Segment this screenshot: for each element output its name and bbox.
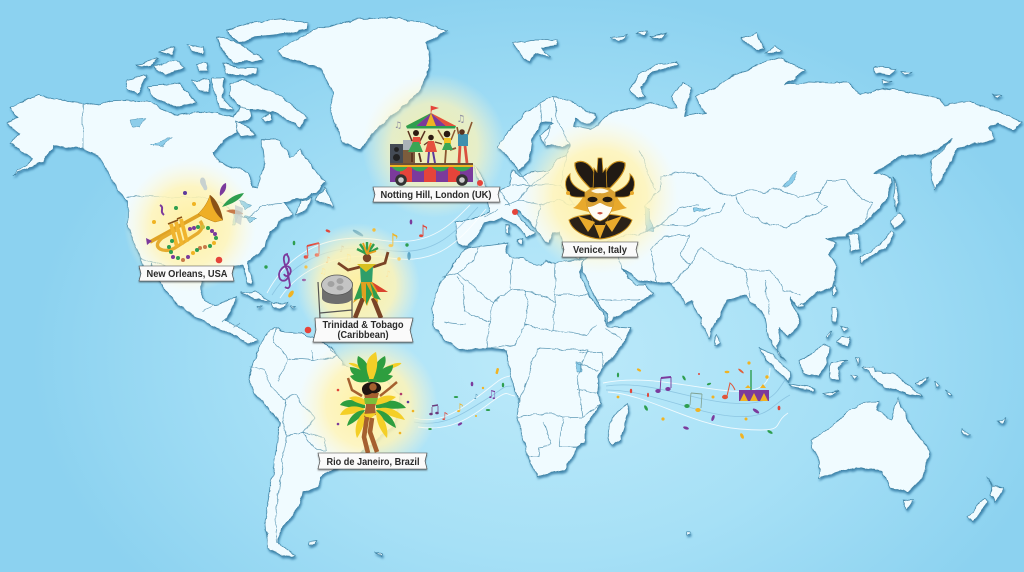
side feathers bbox=[340, 395, 406, 438]
Caribbean islands bbox=[240, 292, 296, 309]
glow: Rio bbox=[298, 335, 438, 475]
Severnaya Zemlya bbox=[742, 33, 782, 53]
Greenland bbox=[278, 18, 447, 150]
dancer three bbox=[438, 130, 456, 163]
small notes: ♪ bbox=[325, 256, 331, 266]
confetti and notes: Atlantic bbox=[264, 220, 428, 298]
New Siberian Islands bbox=[874, 67, 1002, 98]
icon: beamed note bbox=[304, 243, 319, 259]
float deck bbox=[390, 163, 473, 165]
confetti and notes: Brazil to Africa: ♪ bbox=[456, 401, 464, 415]
bikini bbox=[364, 398, 378, 404]
dancer two bbox=[424, 135, 442, 163]
small notes: ♪ bbox=[387, 230, 399, 252]
Eurasia bbox=[455, 58, 1022, 360]
legs bbox=[355, 298, 381, 318]
glow: Trinidad bbox=[296, 223, 420, 347]
icon: Trinidad dancer bbox=[338, 242, 388, 318]
Pacific islands bbox=[686, 382, 1007, 535]
New Guinea bbox=[863, 367, 928, 397]
speaker bbox=[390, 144, 403, 163]
label: Rio de Janeiro, Brazil: Rio de Janeiro, Brazil bbox=[326, 457, 420, 468]
New Zealand bbox=[967, 477, 1003, 521]
Africa bbox=[432, 243, 632, 477]
legs bbox=[364, 417, 377, 453]
Australia bbox=[812, 398, 929, 492]
music stave: Caribbean to London bbox=[267, 205, 486, 298]
confetti and notes: Brazil to Africa bbox=[428, 368, 504, 430]
music stave: Brazil to Africa bbox=[414, 376, 515, 428]
Sri Lanka bbox=[714, 335, 720, 346]
confetti around trumpet bbox=[152, 177, 244, 225]
glow: New Orleans bbox=[124, 160, 256, 292]
small notes: ♪ bbox=[418, 222, 428, 242]
Tasmania bbox=[903, 499, 914, 510]
small notes: ♪ bbox=[339, 245, 345, 255]
head and hair bbox=[362, 382, 381, 395]
bunting bbox=[390, 165, 473, 172]
UK and Ireland bbox=[473, 165, 487, 192]
Taiwan and Hainan bbox=[798, 285, 837, 307]
mask face bbox=[586, 188, 614, 221]
side wings bbox=[573, 194, 627, 212]
music stave: Indian Ocean bbox=[603, 368, 790, 430]
label: Venice, Italy bbox=[562, 242, 638, 257]
Svalbard bbox=[512, 40, 557, 63]
body bbox=[364, 393, 379, 417]
icon: Venetian mask bbox=[566, 158, 634, 239]
icon: carnival float: ♫ bbox=[457, 114, 465, 125]
label: Trinidad & Tobago (Caribbean): Trinidad & Tobago bbox=[322, 320, 404, 331]
notes near float: ♫ bbox=[394, 121, 402, 131]
Indonesia bbox=[759, 345, 860, 396]
red note bbox=[727, 383, 735, 396]
small notes: ♫ bbox=[344, 253, 352, 264]
Madagascar bbox=[607, 403, 629, 446]
glow: Notting Hill bbox=[362, 74, 506, 218]
jester hat bbox=[566, 158, 634, 197]
dancer one bbox=[408, 130, 425, 162]
Franz Josef Land bbox=[610, 30, 667, 41]
small notes: ♫ bbox=[319, 267, 327, 276]
notes bbox=[429, 405, 439, 415]
Novaya Zemlya bbox=[629, 62, 679, 97]
flag bbox=[431, 106, 438, 113]
dots bbox=[337, 389, 414, 434]
label: New Orleans, USA: New Orleans, USA bbox=[146, 269, 228, 280]
confetti and notes: Brazil to Africa: ♪ bbox=[441, 410, 449, 423]
label: Notting Hill, London (UK) bbox=[373, 187, 500, 202]
label: Rio de Janeiro, Brazil bbox=[318, 453, 427, 469]
Philippines bbox=[826, 308, 850, 347]
small notes: ♪ bbox=[385, 270, 391, 280]
green beamed note bbox=[684, 393, 702, 412]
collar bbox=[569, 214, 632, 239]
head and plume bbox=[363, 254, 371, 262]
trumpet bbox=[146, 195, 223, 250]
Sakhalin bbox=[894, 177, 899, 210]
skirt bbox=[353, 282, 388, 306]
label: Venice, Italy: Venice, Italy bbox=[573, 245, 627, 256]
icon: steel drum bbox=[318, 275, 352, 318]
tent roof bbox=[406, 113, 456, 126]
icon: carnival float bbox=[390, 106, 473, 186]
label: Trinidad & Tobago (Caribbean): (Caribbean) bbox=[338, 330, 388, 341]
arms bbox=[338, 252, 388, 270]
dancer four bbox=[457, 122, 472, 163]
glow: Venice bbox=[522, 118, 678, 274]
location markers bbox=[216, 180, 518, 333]
icon: trumpet with beads bbox=[146, 177, 244, 262]
party drum bbox=[739, 370, 769, 401]
confetti and notes: Brazil to Africa: ♪ bbox=[474, 393, 478, 401]
confetti and notes: Brazil to Africa: ♫ bbox=[487, 388, 497, 401]
North America bbox=[7, 95, 325, 343]
arms bbox=[348, 378, 397, 396]
label: Trinidad & Tobago (Caribbean) bbox=[313, 318, 413, 342]
small notes bbox=[319, 222, 428, 280]
icon: treble clef bbox=[279, 254, 291, 288]
southern Atlantic islands bbox=[308, 541, 382, 557]
confetti bbox=[617, 361, 780, 439]
float body bbox=[390, 165, 473, 182]
purple beamed note bbox=[655, 377, 671, 393]
torso bbox=[360, 266, 373, 284]
Japan bbox=[860, 213, 905, 263]
label: Notting Hill, London (UK): Notting Hill, London (UK) bbox=[380, 190, 492, 201]
icon: Rio samba dancer bbox=[337, 352, 414, 453]
label: New Orleans, USA bbox=[139, 266, 234, 281]
lakes, inland seas and country borders bbox=[83, 96, 872, 543]
headdress feathers bbox=[349, 352, 401, 382]
wheels bbox=[395, 174, 407, 186]
confetti, notes and drum: Indian Ocean bbox=[617, 361, 780, 439]
South America bbox=[248, 328, 400, 557]
Canadian Arctic islands bbox=[230, 80, 307, 127]
Sicily, Sardinia, Corsica, Cyprus bbox=[506, 225, 582, 259]
beads bbox=[167, 225, 218, 262]
